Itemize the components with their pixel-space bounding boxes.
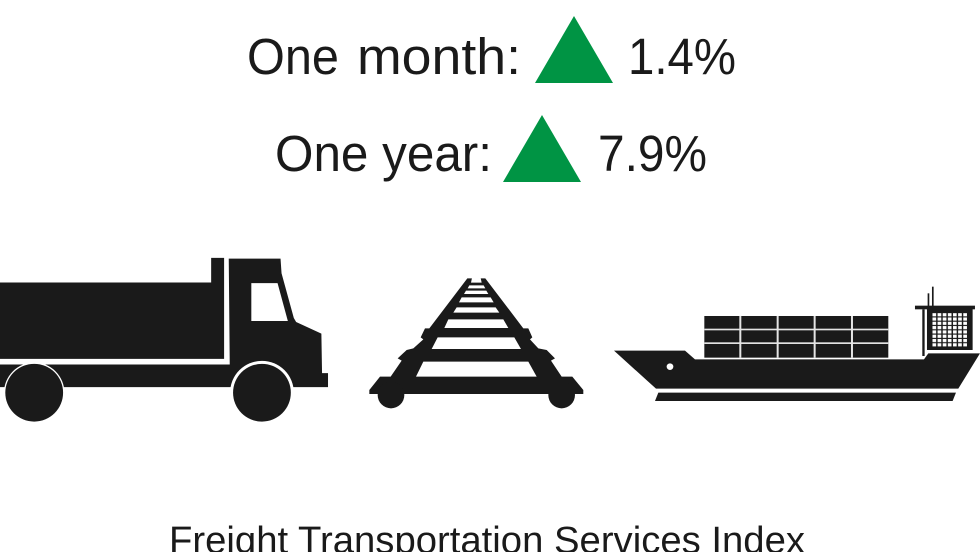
hull (614, 351, 980, 389)
porthole (667, 363, 673, 370)
icon: green up triangle, one year (503, 115, 581, 182)
one year change (275, 115, 707, 182)
icon: truck (0, 258, 328, 425)
icon: green up triangle, one month (535, 16, 613, 83)
icon: railway track (369, 278, 583, 408)
icon: container ship (614, 287, 980, 401)
one year value: 7.9% (598, 125, 707, 182)
one month value: 1.4% (628, 28, 736, 85)
one month label: month: (357, 28, 521, 85)
containers (704, 316, 888, 358)
one month change (247, 16, 736, 85)
one month label: One (247, 28, 339, 85)
one year label: One year: (275, 125, 492, 182)
bridge tower (915, 287, 975, 356)
keel stripe (655, 393, 956, 401)
